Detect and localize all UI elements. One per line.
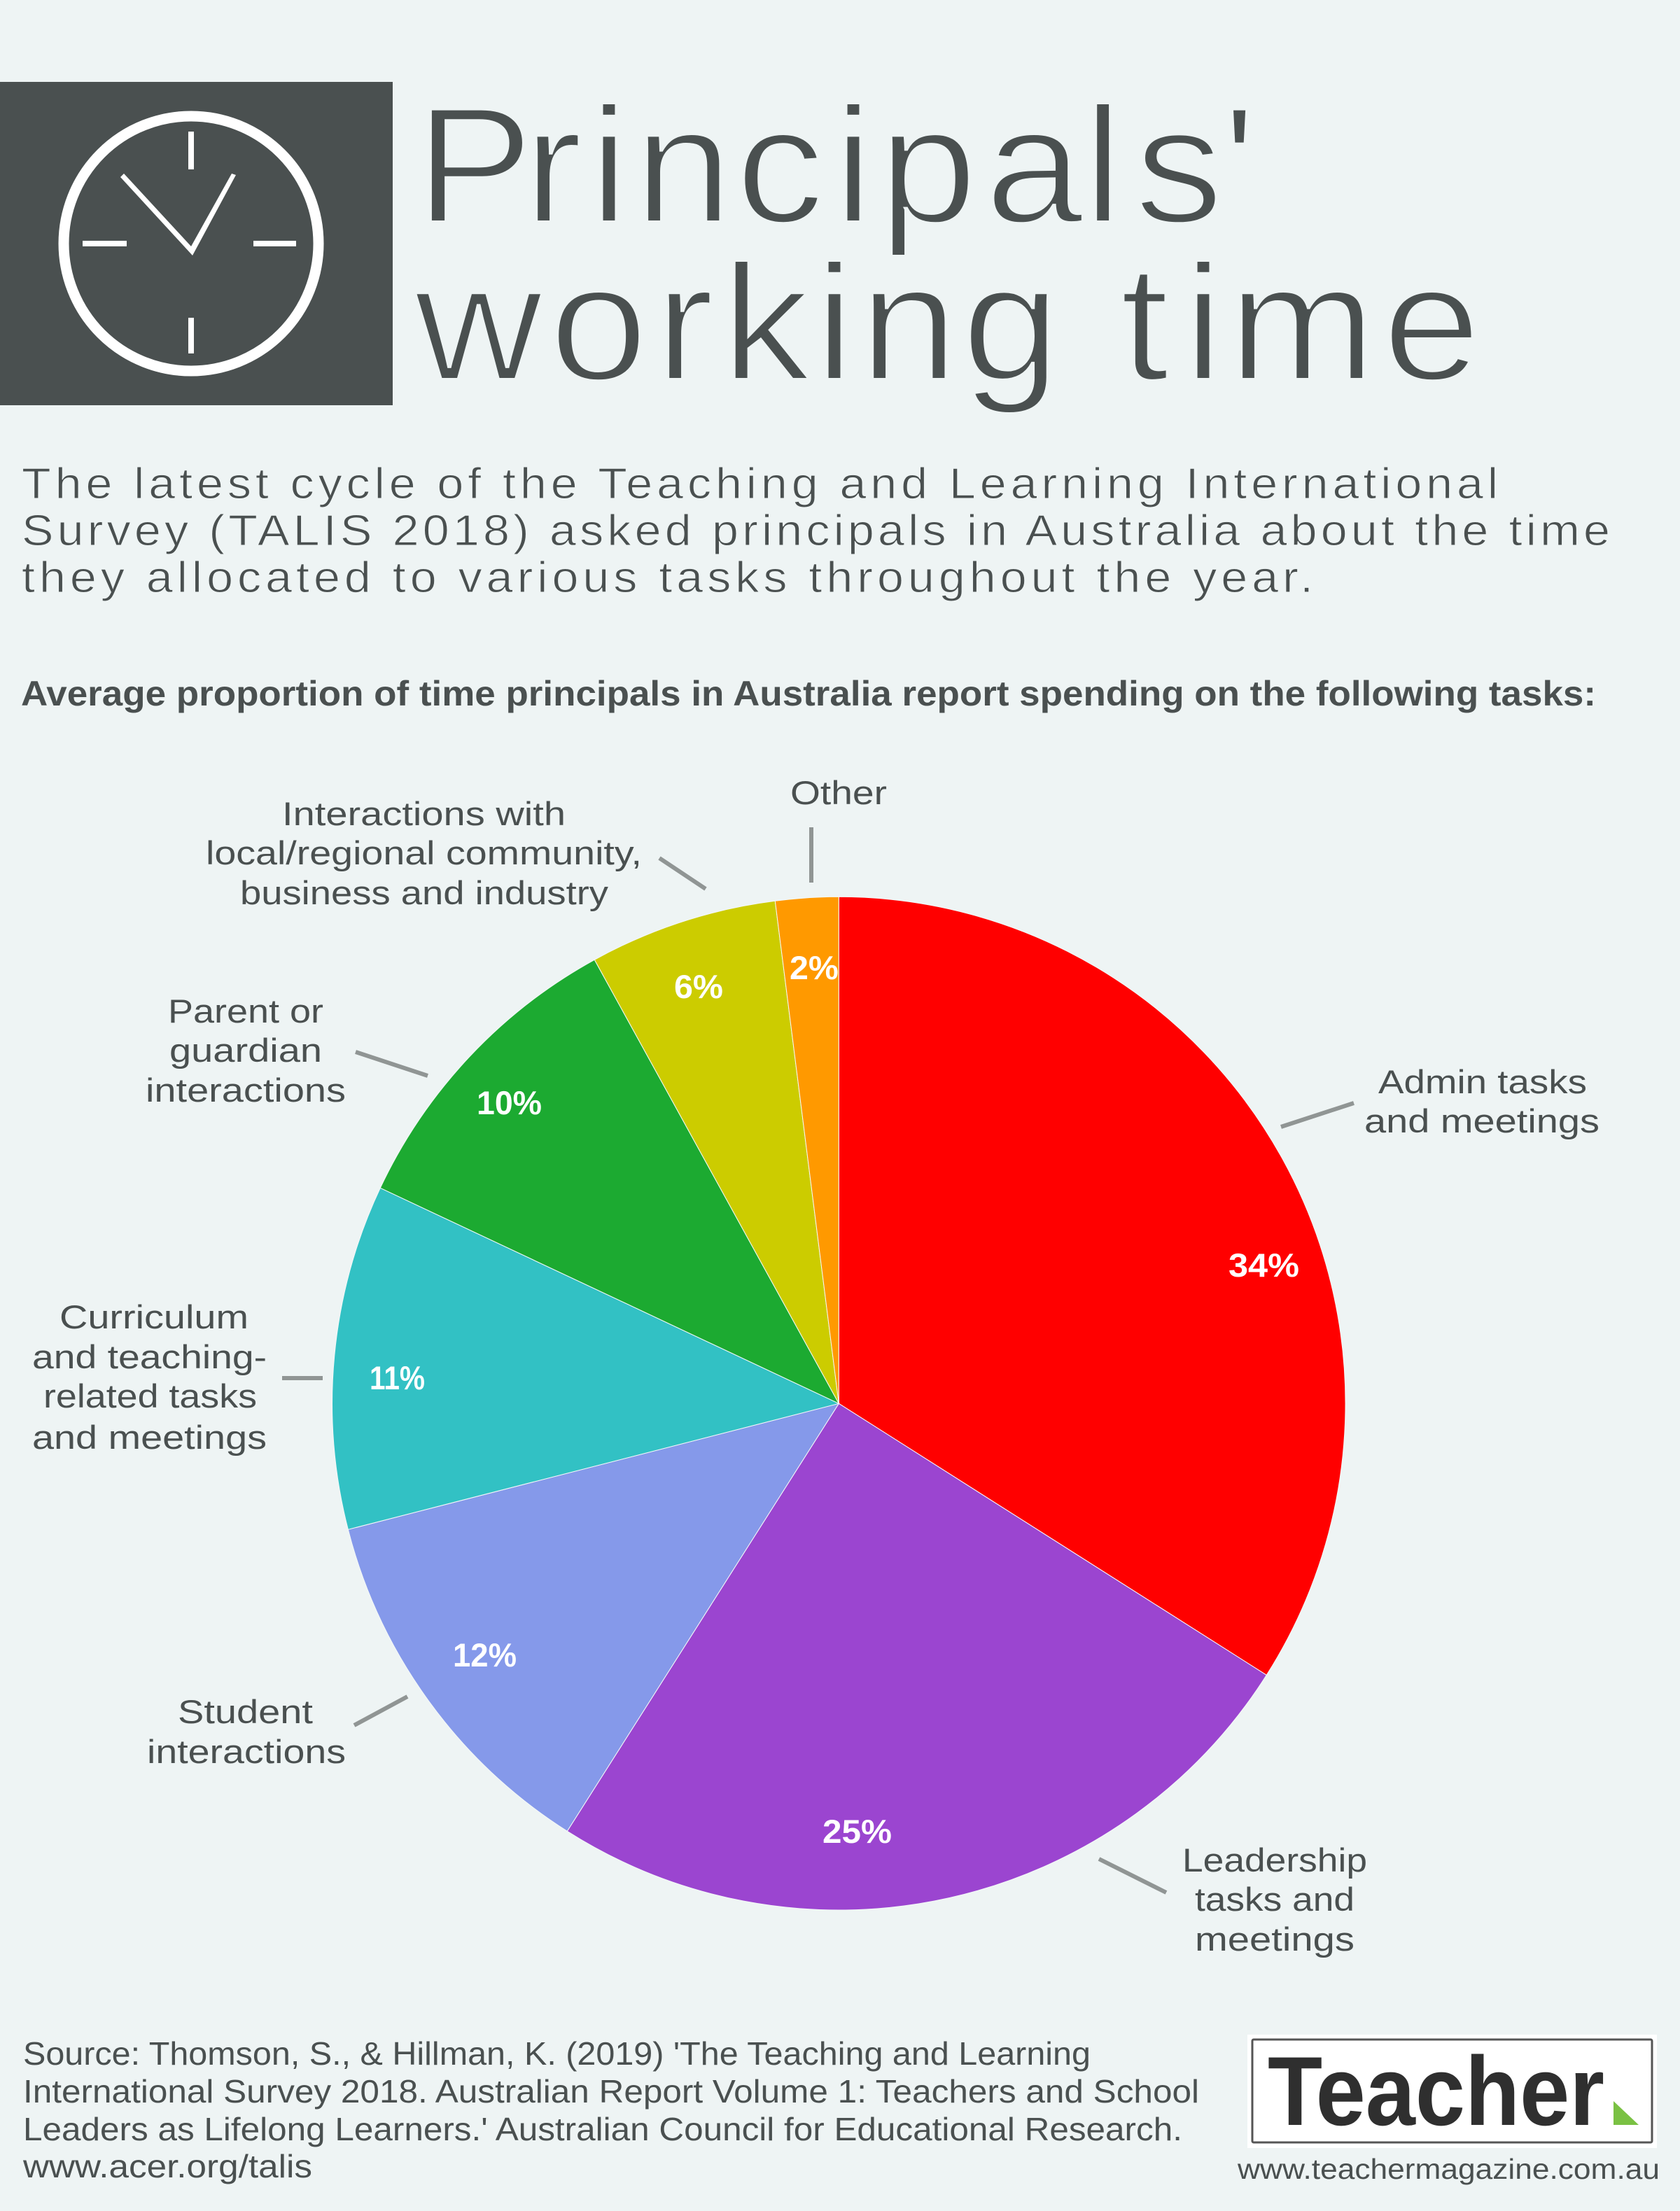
slice: leadership 25%: [567, 1403, 1266, 1910]
label: community: local/regional community,: [206, 834, 642, 871]
label: leadership: tasks and: [1195, 1881, 1354, 1918]
slice: community 6%: [594, 901, 839, 1403]
percentage values: 10%: [477, 1084, 542, 1121]
percentage values: 6%: [674, 968, 723, 1005]
label: leadership: Leadership: [1182, 1841, 1367, 1879]
label: curriculum: and teaching-: [32, 1338, 267, 1375]
label: student interactions: interactions: [147, 1733, 346, 1770]
label: admin tasks: [1281, 1063, 1600, 1139]
source text: Leaders as Lifelong Learners.' Australian Council for Educational Research.: [23, 2111, 1182, 2147]
percentage values: 34%: [1228, 1247, 1299, 1284]
label: admin tasks: Admin tasks: [1378, 1063, 1587, 1100]
chart heading: Average proportion of time principals in Australia report spending on the following tasks:: [21, 674, 1596, 713]
icon: clock panel: [0, 82, 393, 405]
slice: parent interactions 10%: [380, 960, 839, 1403]
title: Principals': [416, 73, 1256, 258]
website url: www.teachermagazine.com.au: [1237, 2153, 1660, 2185]
label: student interactions: [147, 1693, 407, 1770]
source text: www.acer.org/talis: [22, 2148, 312, 2184]
slice: curriculum 11%: [332, 1188, 839, 1529]
percentage values: 12%: [453, 1636, 517, 1673]
intro text block: Survey (TALIS 2018) asked principals in Australia about the time: [22, 506, 1610, 554]
label: other: Other: [790, 774, 887, 811]
logo: Teacher: Teacher: [1268, 2036, 1604, 2146]
slice: admin tasks 34%: [839, 897, 1345, 1675]
label: curriculum: Curriculum: [59, 1298, 248, 1335]
percentage values: 11%: [370, 1359, 425, 1396]
title: [414, 73, 1480, 415]
pie chart: [332, 897, 1345, 1910]
label: curriculum: related tasks: [43, 1377, 257, 1415]
slice: other 2%: [775, 897, 839, 1403]
intro text block: they allocated to various tasks throughout the year.: [22, 553, 1313, 601]
source text: Source: Thomson, S., & Hillman, K. (2019) 'The Teaching and Learning: [23, 2035, 1091, 2072]
title: working time: [414, 230, 1480, 415]
source text: International Survey 2018. Australian Report Volume 1: Teachers and School: [23, 2073, 1199, 2110]
intro text block: [22, 459, 1610, 601]
label: community: business and industry: [240, 874, 609, 911]
percentage values: 25%: [822, 1813, 892, 1850]
label: admin tasks: and meetings: [1364, 1102, 1600, 1139]
slice: student interactions 12%: [348, 1403, 839, 1831]
label: student interactions: Student: [178, 1693, 313, 1730]
label: leadership: meetings: [1195, 1921, 1354, 1958]
label: community: [206, 795, 706, 911]
label: parent interactions: Parent or: [168, 992, 323, 1030]
source text: [22, 2035, 1199, 2184]
intro text block: The latest cycle of the Teaching and Learning International: [22, 459, 1498, 507]
percentage values: [370, 949, 1299, 1850]
label: leadership: [1099, 1841, 1367, 1958]
label: parent interactions: guardian: [169, 1032, 322, 1069]
label: parent interactions: interactions: [146, 1072, 346, 1109]
label: curriculum: [32, 1298, 323, 1456]
label: curriculum: and meetings: [32, 1419, 267, 1456]
label: parent interactions: [146, 992, 428, 1109]
label: community: Interactions with: [282, 795, 566, 832]
percentage values: 2%: [790, 949, 839, 986]
